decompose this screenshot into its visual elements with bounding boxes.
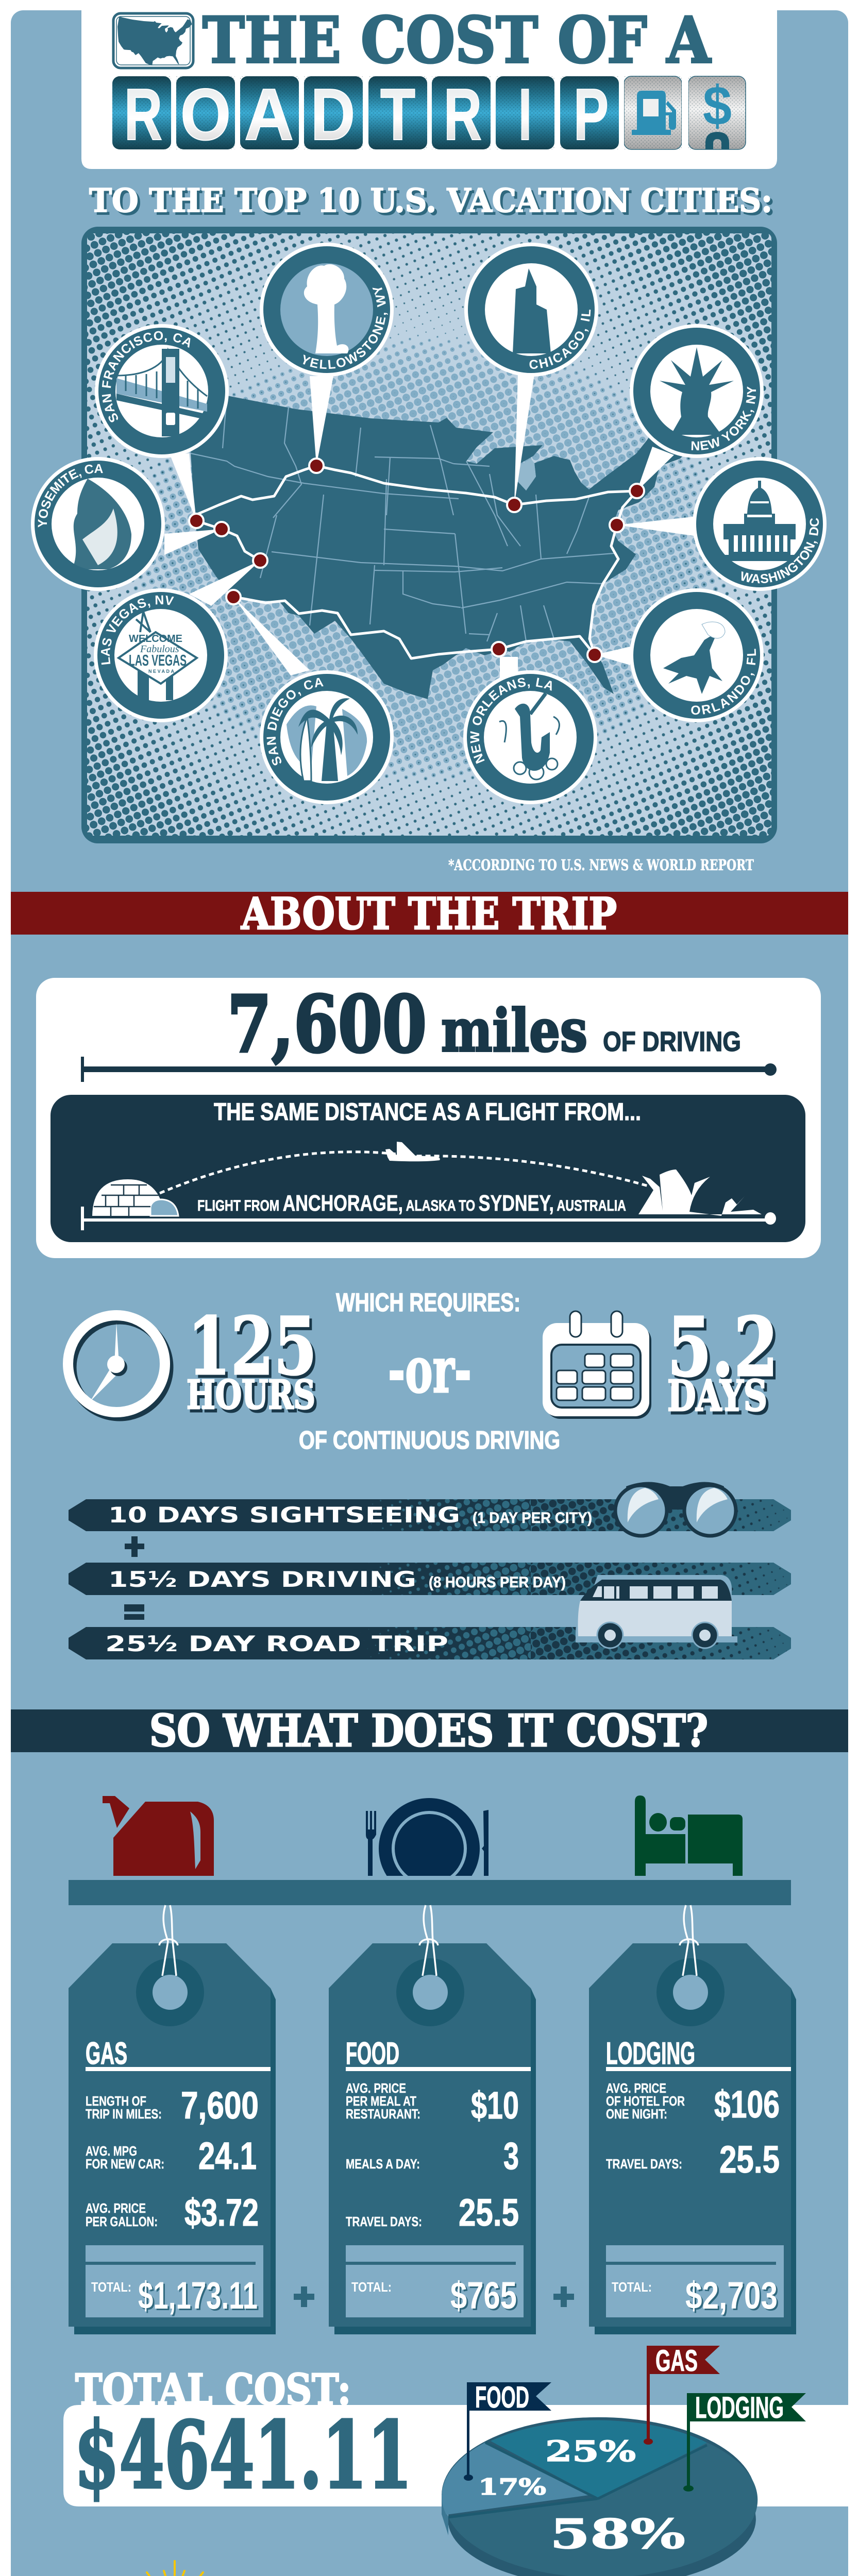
distance line xyxy=(81,1057,777,1082)
tag rows: $10 xyxy=(471,2084,519,2127)
icon: binoculars xyxy=(615,1482,736,1536)
slice: gas xyxy=(491,2420,707,2499)
banner: about the trip xyxy=(11,888,848,939)
ribbon: sightseeing: (1 DAY PER CITY) xyxy=(473,1510,592,1527)
badge: las vegas: LAS VEGAS xyxy=(129,651,187,669)
tag rows: MEALS A DAY: xyxy=(346,2156,420,2172)
total box: TOTAL: xyxy=(351,2279,392,2295)
halftone dots, mid blue xyxy=(125,331,737,787)
ribbon backgrounds xyxy=(69,1494,791,1664)
stat: 7,600 miles: OF DRIVING xyxy=(603,1026,741,1057)
trip breakdown ribbons xyxy=(69,1482,791,1664)
flag: gas xyxy=(644,2344,720,2445)
badge: yosemite xyxy=(31,457,165,591)
badge: orlando xyxy=(630,588,764,722)
tag rows xyxy=(606,2080,780,2181)
road trip tiles: R xyxy=(444,74,482,156)
icon: piggy bank xyxy=(57,2561,307,2576)
title block xyxy=(81,0,777,169)
flag: food: FOOD xyxy=(475,2381,529,2414)
icon: gas pump tile xyxy=(632,91,676,135)
badge: new orleans: NEW ORLEANS, LA xyxy=(470,678,552,764)
badge: new orleans xyxy=(463,670,597,804)
ribbon: sightseeing xyxy=(108,1502,592,1528)
text: continuous driving: OF CONTINUOUS DRIVING xyxy=(299,1427,560,1454)
badge: washington: WASHINGTON, DC xyxy=(741,518,819,583)
coin light xyxy=(145,2561,204,2576)
icon: dollar sign tile: $ xyxy=(703,74,732,137)
badge: yosemite: YOSEMITE, CA xyxy=(38,464,103,528)
tag rows xyxy=(86,2084,259,2234)
route pins xyxy=(189,459,644,662)
state lines xyxy=(191,397,614,641)
tag rows: 25.5 xyxy=(459,2191,519,2234)
tag rows: ONE NIGHT: xyxy=(606,2106,667,2122)
badge: orlando: ORLANDO, FL xyxy=(691,649,756,715)
stat: 125 hours: 125 xyxy=(190,1303,319,1396)
tag rows: AVG. MPG xyxy=(86,2143,137,2159)
road trip tiles: T xyxy=(380,74,415,156)
tag rows: FOR NEW CAR: xyxy=(86,2156,164,2172)
pie labels: 25% xyxy=(545,2434,636,2468)
tag rows: 7,600 xyxy=(181,2084,259,2127)
tag rows xyxy=(346,2080,519,2234)
road trip tiles: P xyxy=(574,74,609,156)
icon: calendar xyxy=(543,1311,651,1419)
total box: $2,703 xyxy=(687,2276,779,2318)
banner: about the trip: ABOUT THE TRIP xyxy=(241,888,617,939)
road trip tiles: O xyxy=(180,74,231,156)
tag rows: RESTAURANT: xyxy=(346,2106,420,2122)
distance line xyxy=(81,1207,776,1230)
tag rows: 25.5 xyxy=(719,2138,780,2181)
ribbon: driving: 15½ DAYS DRIVING xyxy=(108,1567,416,1592)
flight panel: THE SAME DISTANCE AS A FLIGHT FROM... xyxy=(214,1098,641,1125)
stat: 7,600 miles xyxy=(227,978,741,1070)
badge: san diego: SAN DIEGO, CA xyxy=(267,678,324,766)
icon: plate xyxy=(366,1798,489,1876)
ribbon: driving xyxy=(108,1567,566,1592)
usa map xyxy=(191,389,701,699)
tag heading: GAS xyxy=(86,2036,127,2071)
tag rows: LENGTH OF xyxy=(86,2093,146,2109)
text: which requires: WHICH REQUIRES: xyxy=(336,1288,520,1317)
stat: 125 hours: HOURS xyxy=(187,1372,315,1418)
flag: lodging xyxy=(683,2391,806,2492)
tag rows: TRAVEL DAYS: xyxy=(346,2214,422,2229)
road trip tiles: R xyxy=(124,74,162,156)
plus sign xyxy=(125,1536,144,1557)
tag: lodging xyxy=(589,1905,796,2334)
tag rows: AVG. PRICE xyxy=(606,2080,666,2096)
frame xyxy=(81,227,777,843)
badge: san francisco xyxy=(95,324,229,458)
ribbon: total days: 25½ DAY ROAD TRIP xyxy=(105,1631,448,1656)
stat: 7,600 miles: 7,600 xyxy=(227,978,427,1070)
badge: las vegas xyxy=(94,588,228,722)
stat: 5.2 days: 5.2 xyxy=(667,1300,778,1395)
total box: TOTAL: xyxy=(91,2279,131,2295)
title white card xyxy=(81,0,777,169)
road trip tiles: A xyxy=(244,74,294,156)
pointers xyxy=(164,375,694,680)
icon: sydney opera house xyxy=(638,1170,762,1216)
tag rows: $3.72 xyxy=(184,2191,259,2234)
road trip tiles: D xyxy=(311,74,355,156)
tag: food xyxy=(329,1905,536,2334)
total cost amount: $4641.11 xyxy=(74,2401,412,2509)
subheading: to the top 10: TO THE TOP 10 U.S. VACATION CITIES: xyxy=(92,184,775,222)
total box: $1,173.11 xyxy=(138,2274,258,2317)
subheading: to the top 10: TO THE TOP 10 U.S. VACATION CITIES: xyxy=(89,181,772,219)
map panel xyxy=(31,227,827,843)
flight path xyxy=(160,1152,648,1193)
icon: usa map stamp xyxy=(113,13,193,68)
total box: $765 xyxy=(452,2276,518,2318)
badge: new york xyxy=(630,324,764,458)
tag: gas xyxy=(69,1905,276,2334)
icon: gas can xyxy=(103,1796,214,1876)
total box: TOTAL: xyxy=(612,2279,652,2295)
tag rows: AVG. PRICE xyxy=(346,2080,406,2096)
white bar xyxy=(63,2405,848,2506)
pie labels: 58% xyxy=(550,2510,685,2558)
flag: food xyxy=(464,2381,551,2481)
slice: lodging xyxy=(448,2443,757,2576)
tag rows: TRAVEL DAYS: xyxy=(606,2156,682,2172)
icon: bus xyxy=(576,1575,737,1648)
badge: yellowstone xyxy=(260,243,394,376)
badge: las vegas: LAS VEGAS, NV xyxy=(101,596,174,665)
card: distance xyxy=(36,978,821,1258)
badge: new york: NEW YORK, NY xyxy=(692,386,756,450)
total box: $1,173.11 xyxy=(140,2276,259,2318)
tag heading: FOOD xyxy=(346,2036,399,2071)
tag rows: OF HOTEL FOR xyxy=(606,2093,685,2109)
ribbon: driving: (8 HOURS PER DAY) xyxy=(429,1574,566,1591)
flight panel xyxy=(50,1095,805,1242)
tag rows: AVG. PRICE xyxy=(86,2200,146,2216)
stat: 5.2 days xyxy=(667,1300,781,1424)
tag rows: PER GALLON: xyxy=(86,2214,158,2229)
stat: 5.2 days: 5.2 xyxy=(670,1303,781,1398)
road trip tiles xyxy=(112,74,746,156)
total cost block xyxy=(63,2365,848,2509)
total cost label: TOTAL COST: xyxy=(75,2365,351,2415)
icon: igloo xyxy=(92,1179,178,1216)
badge: chicago xyxy=(464,243,598,377)
shelf xyxy=(69,1880,791,1905)
footnote: according to: *ACCORDING TO U.S. NEWS & WORLD REPORT xyxy=(448,856,754,874)
pie labels xyxy=(478,2434,685,2558)
slice: food xyxy=(442,2443,593,2515)
stat: 125 hours: 125 xyxy=(188,1300,317,1393)
tag rows: $106 xyxy=(714,2083,780,2126)
tag heading xyxy=(346,2036,531,2071)
route line xyxy=(196,466,637,658)
total box xyxy=(86,2245,263,2318)
lakes xyxy=(518,459,536,490)
badge: san diego xyxy=(260,670,394,804)
ribbon: sightseeing: 10 DAYS SIGHTSEEING xyxy=(108,1502,460,1528)
pie labels: 17% xyxy=(478,2475,546,2500)
tag heading xyxy=(86,2036,271,2071)
flag: lodging: LODGING xyxy=(695,2391,784,2425)
tag rows: TRIP IN MILES: xyxy=(86,2106,162,2122)
stat: 125 hours xyxy=(187,1300,319,1421)
badge: las vegas: NEVADA xyxy=(148,669,174,674)
flight caption: FLIGHT FROM ANCHORAGE, ALASKA TO SYDNEY, AUSTRALIA xyxy=(197,1191,626,1216)
halftone dots, dark xyxy=(87,233,771,836)
badge: las vegas: Fabulous xyxy=(140,643,179,655)
flag: gas: GAS xyxy=(655,2344,698,2378)
badge: las vegas: WELCOME xyxy=(129,633,182,645)
plus sign xyxy=(294,2286,314,2307)
tag rows: PER MEAL AT xyxy=(346,2093,416,2109)
heading: the cost of a: THE COST OF A xyxy=(203,4,711,78)
total box: $765 xyxy=(450,2274,517,2317)
badge: yellowstone: YELLOWSTONE, WY xyxy=(303,287,388,369)
tag rows: 3 xyxy=(503,2134,519,2177)
banner: so what does it cost: SO WHAT DOES IT COST? xyxy=(149,1705,708,1757)
stat: 5.2 days: DAYS xyxy=(667,1371,767,1421)
icon: clock xyxy=(68,1315,168,1416)
badge: washington xyxy=(693,457,827,591)
text: or: -or- xyxy=(388,1333,471,1407)
plus sign xyxy=(553,2286,574,2307)
stat: 7,600 miles: miles xyxy=(441,996,587,1065)
badge: san francisco: SAN FRANCISCO, CA xyxy=(102,331,191,422)
equals sign xyxy=(124,1604,144,1620)
total box: $2,703 xyxy=(685,2274,778,2317)
pie chart xyxy=(442,2344,806,2576)
badge: chicago: CHICAGO, IL xyxy=(530,310,591,369)
total box xyxy=(346,2245,524,2318)
tag rows: 24.1 xyxy=(198,2134,257,2177)
stat: 5.2 days: DAYS xyxy=(670,1375,770,1424)
pie side xyxy=(442,2417,756,2576)
stat: 125 hours: HOURS xyxy=(189,1375,318,1421)
icon: plane xyxy=(385,1142,440,1161)
total box xyxy=(606,2245,784,2318)
icon: bed xyxy=(635,1795,743,1876)
road trip tiles: I xyxy=(518,74,532,156)
tag heading: LODGING xyxy=(606,2036,695,2071)
